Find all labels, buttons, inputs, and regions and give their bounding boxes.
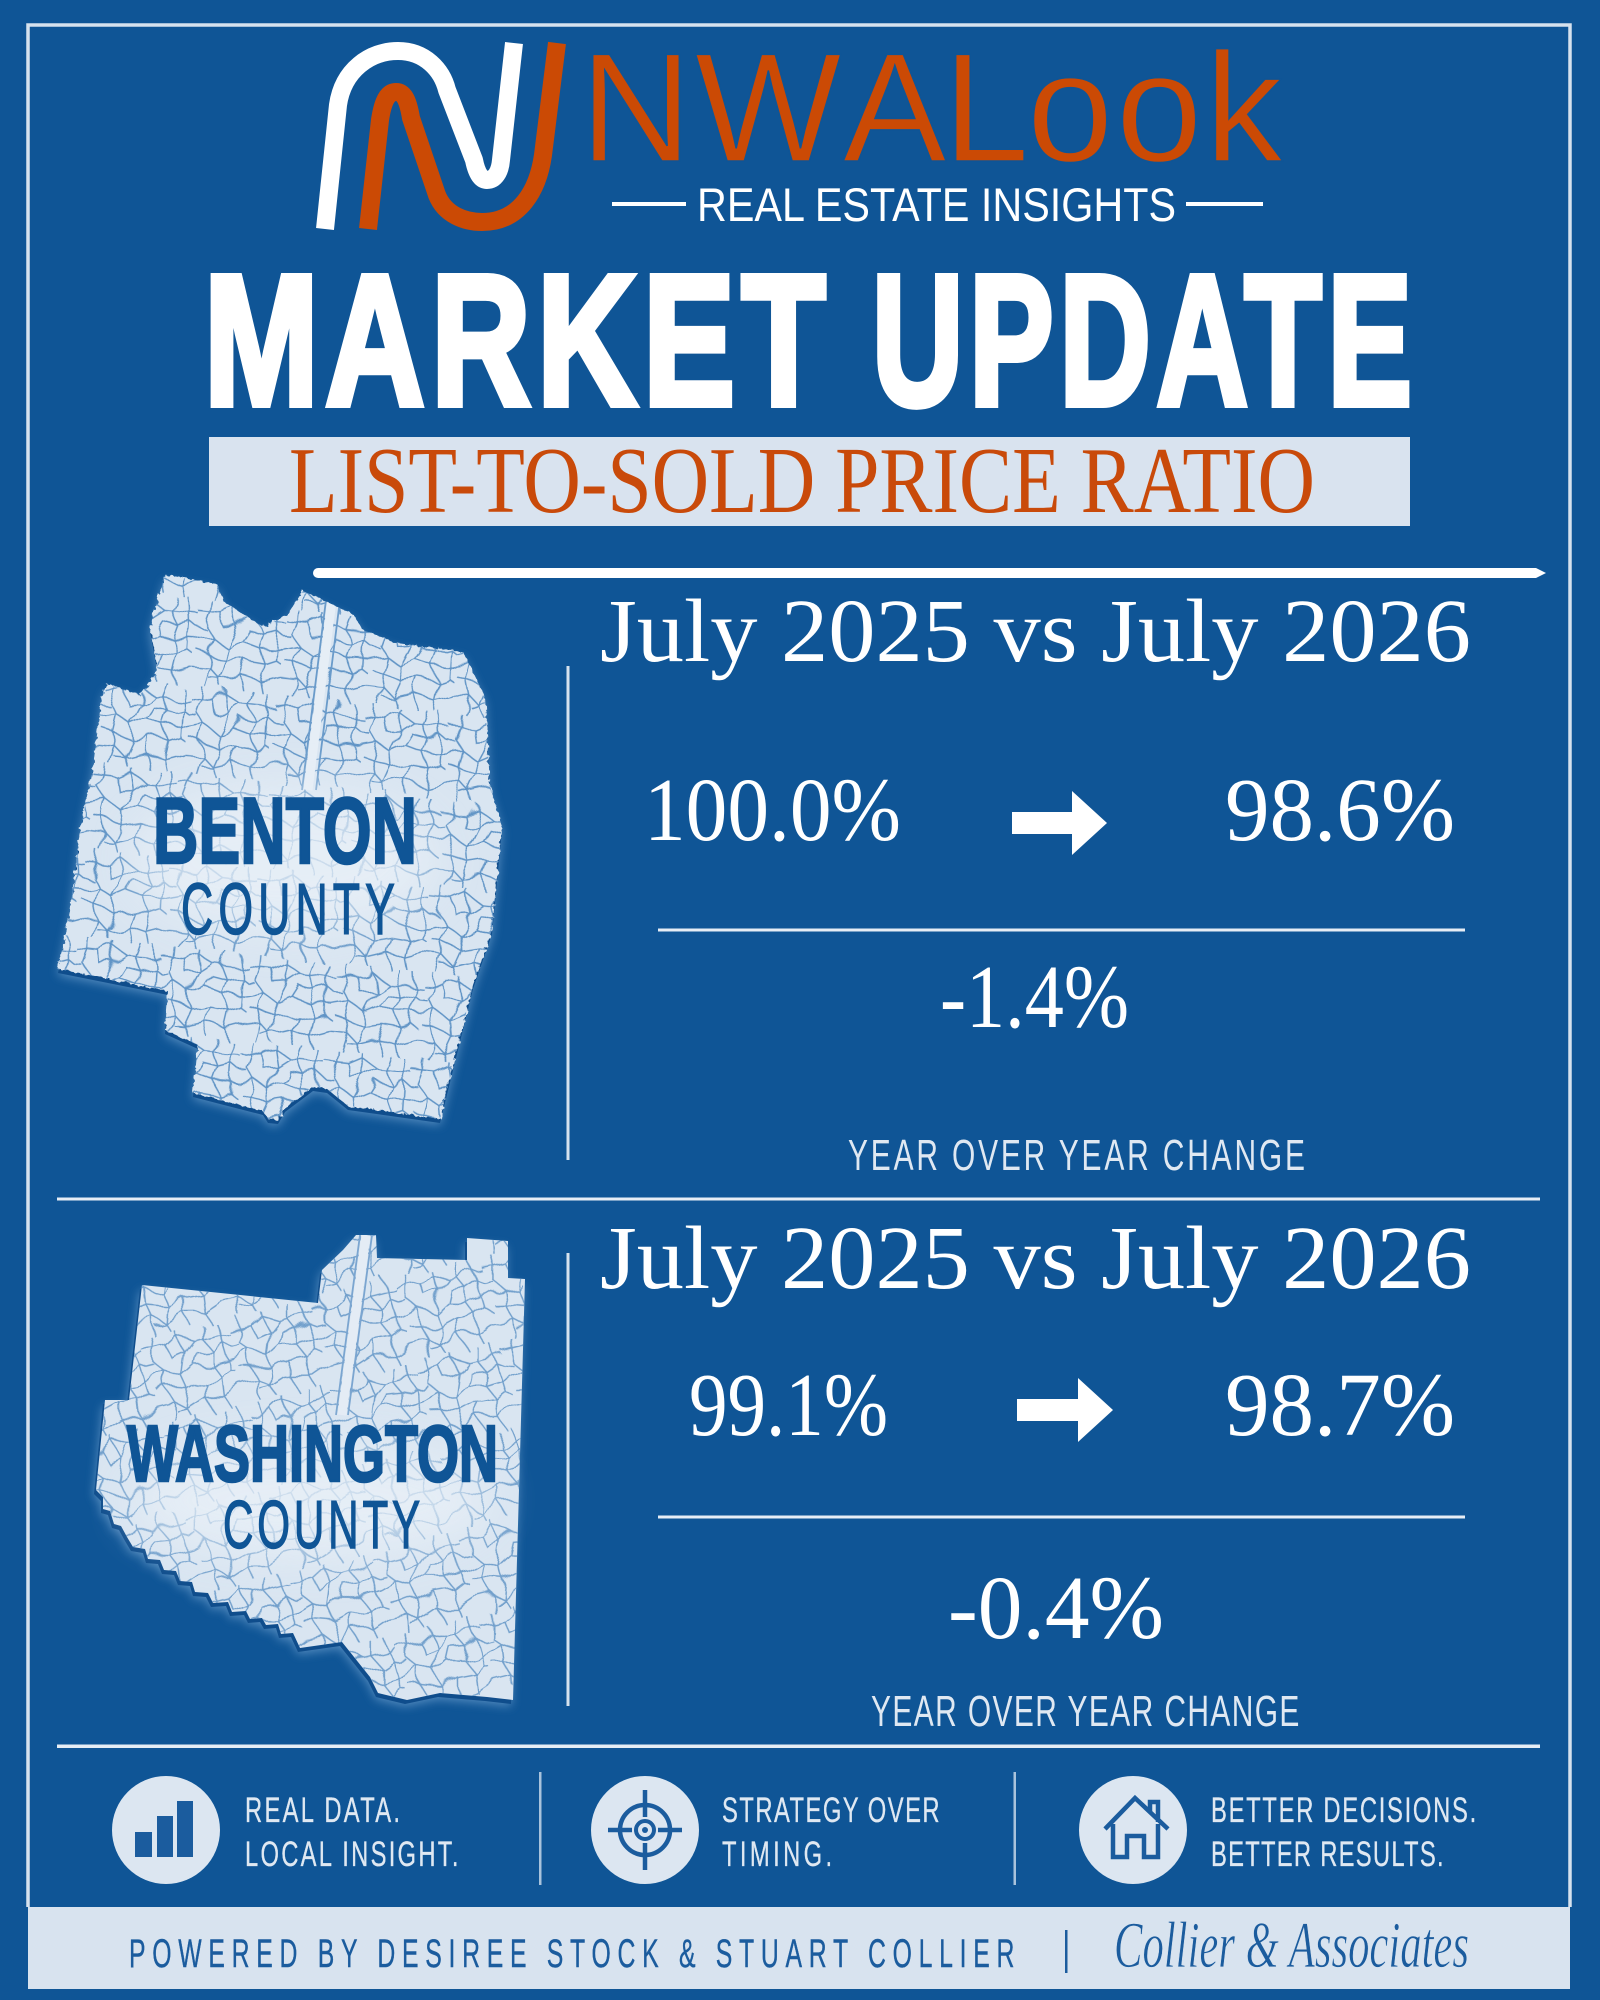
title: market update	[204, 236, 1412, 444]
icon: house	[1079, 1776, 1187, 1884]
text: better decisions better results: BETTER RESULTS.	[1211, 1836, 1444, 1874]
panel: Benton County statistics	[566, 582, 1471, 1179]
text: real data local insight: LOCAL INSIGHT.	[245, 1836, 459, 1874]
panel: Washington County statistics	[566, 1209, 1471, 1735]
wordmark: o	[1027, 21, 1113, 194]
subtitle banner: LIST-TO-SOLD PRICE RATIO	[289, 429, 1315, 533]
period heading: July 2025 vs July 2026	[600, 582, 1471, 681]
title: market update: MARKET	[204, 236, 826, 444]
footer credit: POWERED BY DESIREE STOCK & STUART COLLIER	[129, 1932, 1014, 1977]
item: real data	[112, 1776, 459, 1884]
logo mark	[325, 43, 557, 229]
value July 2026: 98.7%	[1225, 1356, 1455, 1455]
change caption: YEAR OVER YEAR CHANGE	[871, 1686, 1299, 1735]
change value: -1.4%	[940, 948, 1129, 1047]
logo: NWALook Real Estate Insights	[325, 21, 1283, 231]
panel: value propositions	[112, 1772, 1476, 1885]
arrow	[1017, 1378, 1113, 1442]
text: better decisions better results: BETTER DECISIONS.	[1211, 1792, 1476, 1830]
footer band	[28, 1907, 1570, 1989]
text: real data local insight: REAL DATA.	[245, 1792, 400, 1830]
title: market update: UPDATE	[872, 236, 1412, 444]
text: better decisions better results	[1211, 1792, 1476, 1874]
wordmark: W	[695, 21, 841, 194]
change caption: YEAR OVER YEAR CHANGE	[848, 1130, 1305, 1179]
wordmark: N	[580, 21, 692, 194]
item: strategy	[591, 1776, 940, 1884]
icon: bar chart	[112, 1776, 220, 1884]
panel: Washington County map	[89, 1235, 528, 1711]
text: strategy over timing: STRATEGY OVER	[722, 1792, 940, 1830]
period heading: July 2025 vs July 2026	[600, 1209, 1471, 1308]
label: Washington County	[127, 1409, 498, 1562]
value July 2025: 100.0%	[644, 761, 901, 860]
item: better decisions	[1079, 1776, 1476, 1884]
header rule	[313, 568, 1546, 578]
wordmark: k	[1205, 21, 1283, 194]
tagline: REAL ESTATE INSIGHTS	[697, 178, 1176, 231]
wordmark: A	[843, 21, 947, 194]
icon: target	[591, 1776, 699, 1884]
wordmark: L	[943, 21, 1029, 194]
label: Benton County: COUNTY	[181, 869, 395, 950]
label: Washington County: COUNTY	[223, 1487, 420, 1562]
label: Benton County: BENTON	[153, 778, 417, 883]
label: Washington County: WASHINGTON	[127, 1409, 498, 1498]
value July 2026: 98.6%	[1225, 761, 1455, 860]
arrow	[1012, 791, 1107, 855]
wordmark: o	[1116, 21, 1202, 194]
value July 2025: 99.1%	[689, 1356, 888, 1455]
panel: Benton County map	[54, 574, 507, 1130]
text: real data local insight	[245, 1792, 459, 1874]
text: strategy over timing	[722, 1792, 940, 1874]
text: strategy over timing: TIMING.	[722, 1836, 832, 1874]
label: Benton County	[153, 778, 417, 950]
change value: -0.4%	[948, 1559, 1164, 1658]
